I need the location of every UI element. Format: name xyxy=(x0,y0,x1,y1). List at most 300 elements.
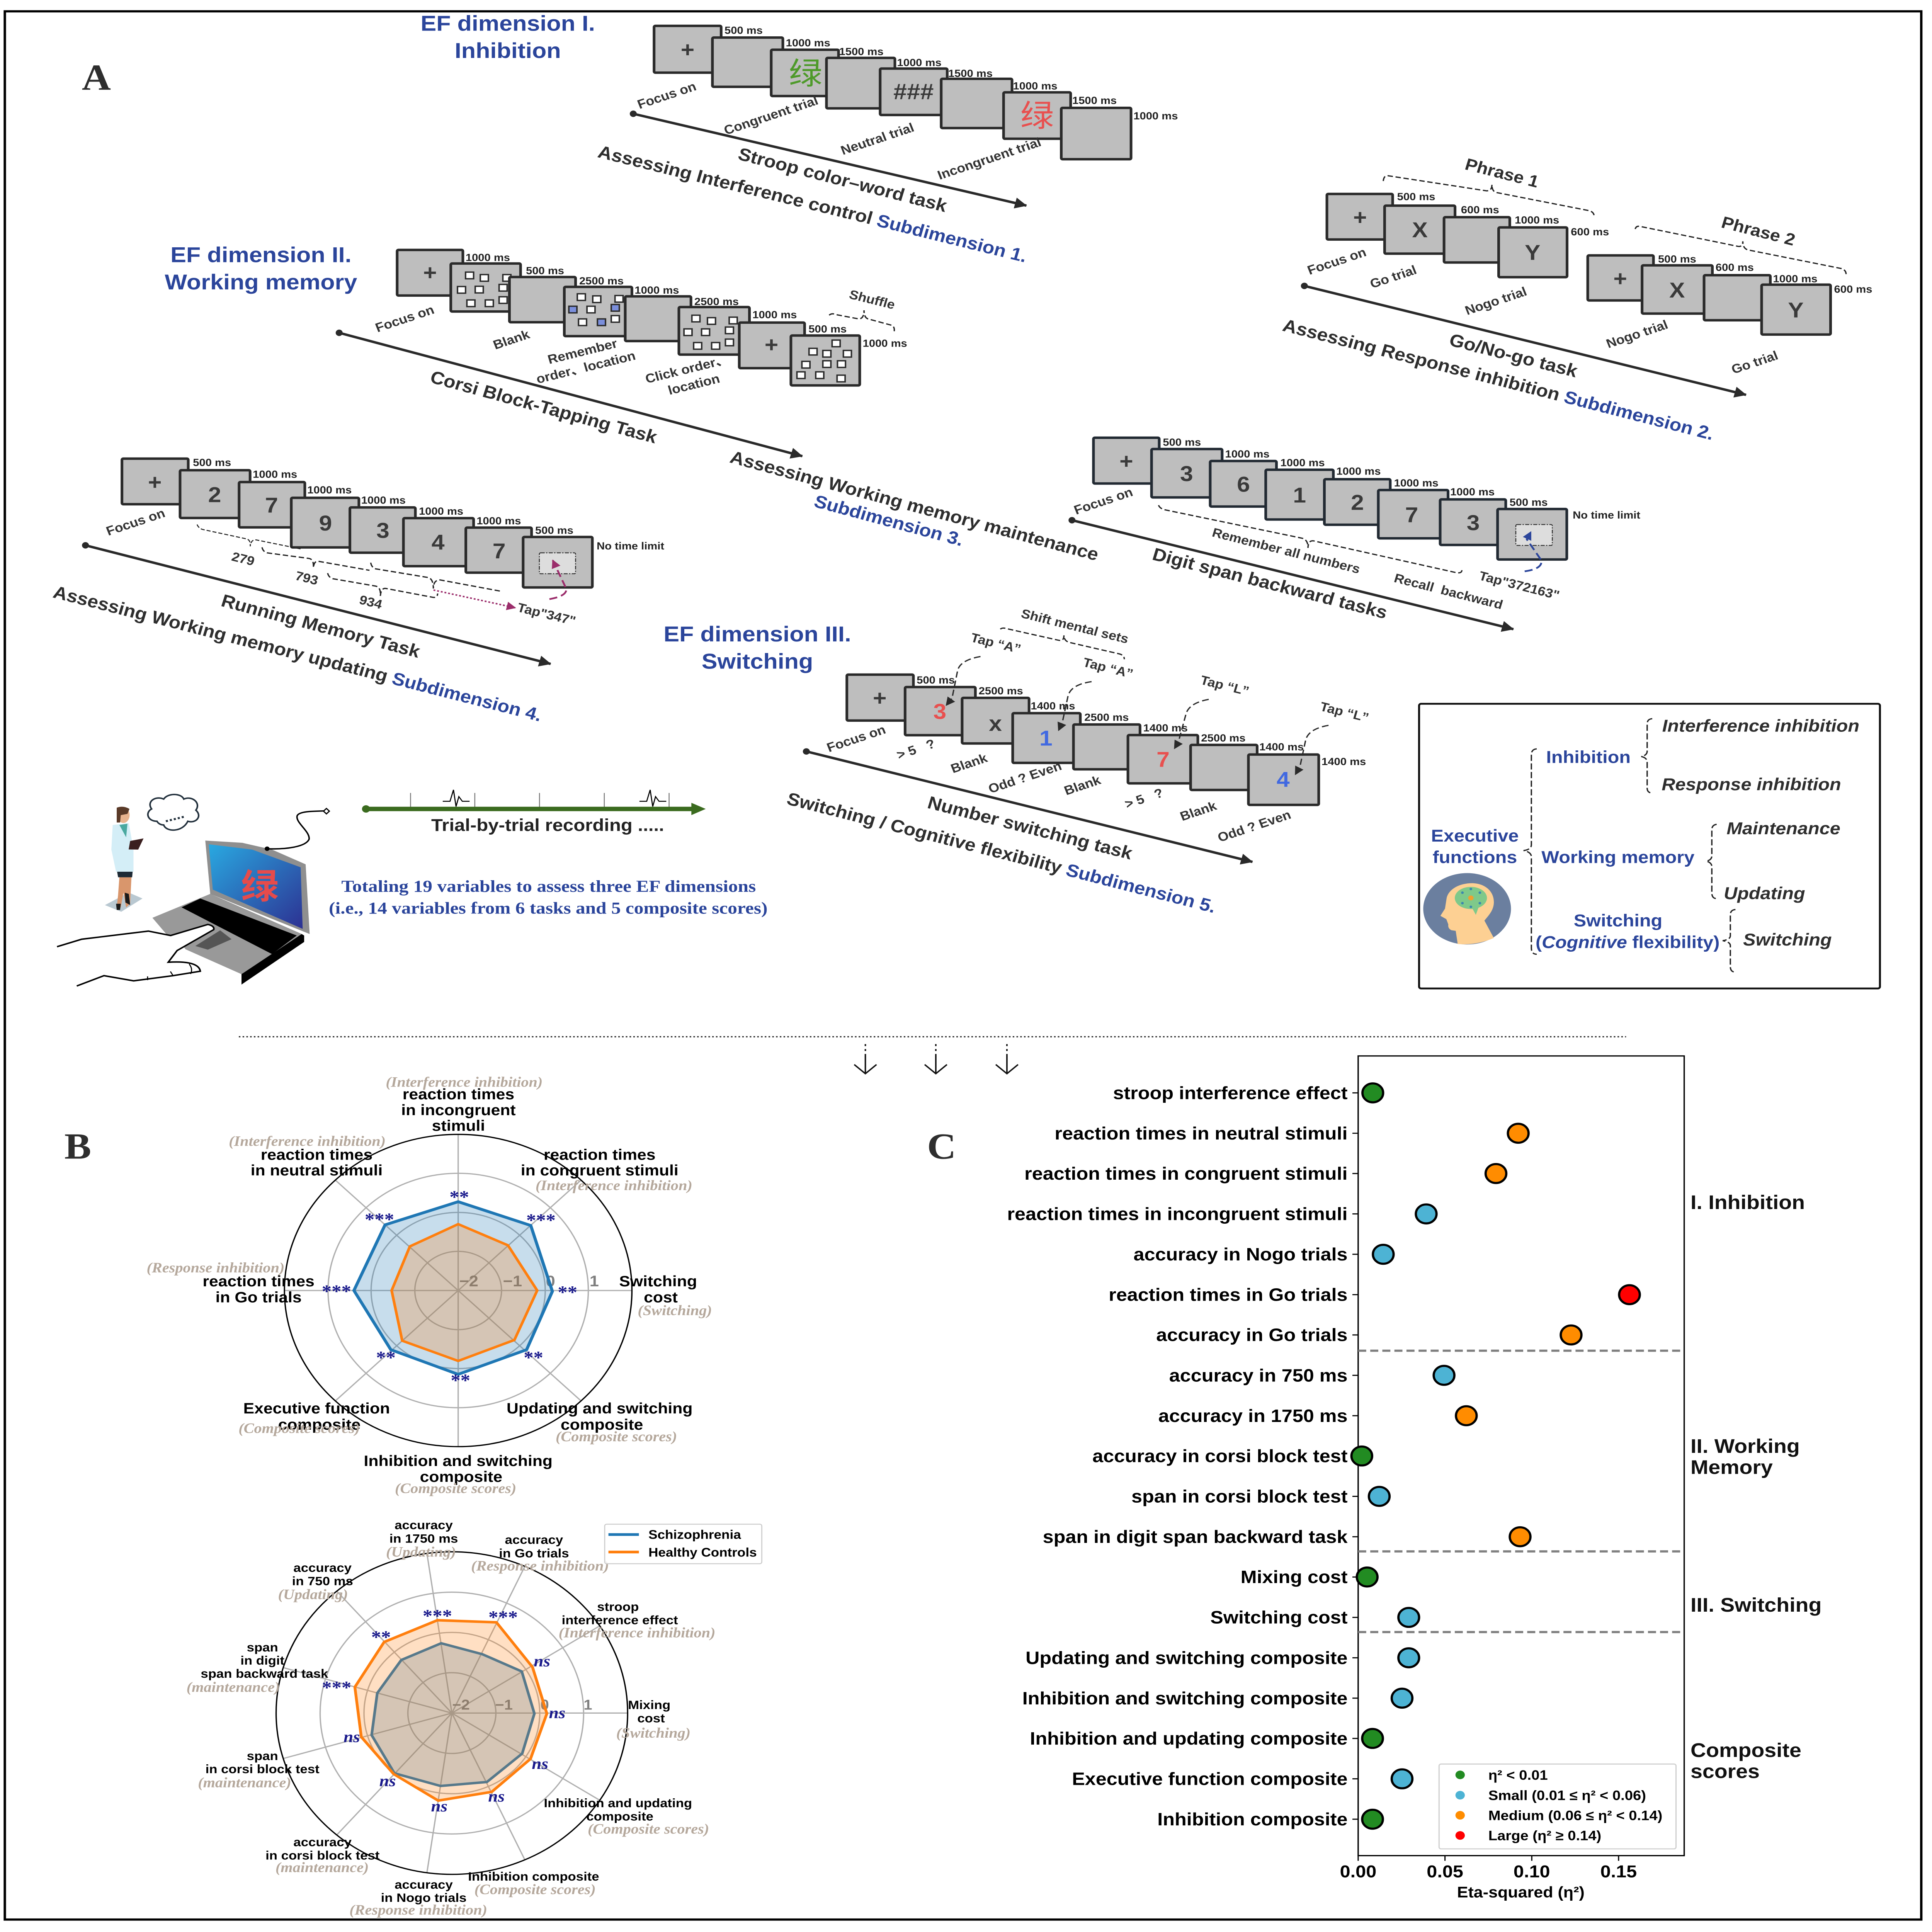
executive functions heading xyxy=(1431,826,1519,867)
Go/No-go trial screens: X xyxy=(1669,278,1685,302)
heading: EF dimension II xyxy=(165,243,357,294)
Shift mental sets bracket: Shift mental sets xyxy=(1019,607,1130,646)
radar tick labels xyxy=(459,1272,599,1290)
task: Digit span backward xyxy=(1068,437,1640,629)
Running memory durations: 1000 ms xyxy=(476,515,521,527)
dimension labels: Working memory xyxy=(1541,848,1694,867)
Corsi durations xyxy=(466,252,907,349)
Go/No-go durations: 500 ms xyxy=(1397,191,1435,202)
subdimension labels: Response inhibition xyxy=(1662,775,1841,794)
variable labels: accuracy in corsi block test xyxy=(1092,1446,1348,1466)
significance stars: ** xyxy=(558,1282,577,1302)
Digit span trial screens: 3 xyxy=(1180,462,1193,486)
icon: laptop xyxy=(152,840,310,985)
variable labels: accuracy in 1750 ms xyxy=(1158,1406,1348,1426)
Stroop trial screens: ### xyxy=(893,79,934,104)
variables summary text: Totaling 19 variables to assess three EF dimensions xyxy=(341,877,756,896)
window digit labels: 793 xyxy=(294,569,320,588)
Digit span labels xyxy=(1072,485,1561,612)
Stroop durations: 1000 ms xyxy=(1133,110,1178,122)
axis labels: Inhibition and updating xyxy=(544,1796,692,1810)
significance markers: *** xyxy=(488,1607,518,1627)
Digit span labels: Remember all numbers xyxy=(1211,526,1362,577)
axis category notes: (Interference inhibition) xyxy=(229,1134,386,1149)
Stroop trial screens: + xyxy=(681,38,694,62)
Corsi durations: 1000 ms xyxy=(863,338,907,349)
Corsi durations: 500 ms xyxy=(526,265,564,276)
axis category notes: (Composite scores) xyxy=(588,1821,709,1837)
Stroop trial labels: Incongruent trial xyxy=(935,135,1043,182)
Corsi trial labels: location xyxy=(667,372,721,398)
plot frame xyxy=(1358,1056,1684,1855)
window digit labels xyxy=(230,549,384,612)
Stroop durations: 1000 ms xyxy=(1013,80,1058,92)
axis category notes: (Response inhibition) xyxy=(147,1260,284,1276)
significance markers: ns xyxy=(532,1755,548,1773)
axis labels: cost xyxy=(637,1712,665,1725)
axis labels: in Go trials xyxy=(499,1547,569,1560)
Digit span trial screens: 1 xyxy=(1293,483,1306,507)
axis labels xyxy=(201,1519,692,1905)
variable labels: reaction times in congruent stimuli xyxy=(1024,1164,1348,1184)
Digit span labels: Focus on xyxy=(1072,485,1135,517)
group labels: II. Working xyxy=(1690,1435,1800,1458)
Digit span trial screens: 3 xyxy=(1467,511,1480,535)
dimension labels xyxy=(1536,747,1719,952)
effect size legend: Medium (0.06 ≤ η² < 0.14) xyxy=(1488,1808,1662,1823)
Number switching durations: 1400 ms xyxy=(1031,700,1075,711)
heading: EF dimension III: EF dimension III. xyxy=(663,622,851,646)
Corsi durations: 2500 ms xyxy=(694,296,739,307)
dimension labels: (Cognitive flexibility) xyxy=(1536,932,1719,952)
subdimension labels: Interference inhibition xyxy=(1662,716,1859,735)
dimension labels: Inhibition xyxy=(1546,747,1631,767)
Running memory trial screens: 7 xyxy=(265,493,278,517)
Go/No-go durations: 500 ms xyxy=(1658,253,1696,265)
significance markers: *** xyxy=(322,1677,351,1697)
Running memory trial screens: 2 xyxy=(208,483,221,507)
Running memory trial screens xyxy=(122,459,592,587)
Corsi trial labels: Blank xyxy=(491,327,532,352)
radar grid xyxy=(276,1552,628,1874)
x axis ticks and labels: 0.05 xyxy=(1427,1862,1463,1881)
Shift mental sets bracket xyxy=(1000,607,1130,659)
Stroop durations: 1500 ms xyxy=(1072,95,1117,106)
executive functions heading: Executive xyxy=(1431,826,1519,845)
Go/No-go trial screens: + xyxy=(1613,267,1627,291)
axis labels: in 750 ms xyxy=(292,1575,353,1588)
significance stars: *** xyxy=(322,1281,351,1301)
variable labels: reaction times in Go trials xyxy=(1109,1285,1348,1305)
panel letter B: B xyxy=(65,1126,91,1167)
Number switching trial screens: 3 xyxy=(933,700,946,724)
icon: thought cloud xyxy=(148,794,199,830)
Digit span durations: 1000 ms xyxy=(1225,448,1270,460)
Stroop durations: 500 ms xyxy=(724,24,763,36)
Digit span durations: 1000 ms xyxy=(1281,457,1325,468)
axis labels: in corsi block test xyxy=(265,1849,379,1862)
Corsi trial screens: + xyxy=(423,261,437,285)
variable labels: Mixing cost xyxy=(1241,1567,1348,1587)
significance stars: *** xyxy=(365,1209,394,1229)
Corsi durations: 1000 ms xyxy=(752,309,797,320)
Shuffle bracket: Shuffle xyxy=(847,287,897,312)
Number switching durations: 500 ms xyxy=(917,674,955,686)
radar chart: schizophrenia worse variables xyxy=(147,1075,712,1497)
subdimension 4 caption: Assessing Working memory updating Subdimension 4. xyxy=(51,582,544,725)
significance stars: ** xyxy=(376,1348,396,1367)
Digit span trial screens: 2 xyxy=(1351,491,1364,515)
icon: hand on keyboard xyxy=(57,924,214,986)
hierarchy brackets xyxy=(1524,719,1735,972)
effect size legend xyxy=(1439,1764,1676,1849)
Running memory durations: 500 ms xyxy=(193,457,231,468)
Go/No-go durations: 600 ms xyxy=(1571,226,1609,238)
variable labels: Inhibition and switching composite xyxy=(1022,1689,1348,1708)
axis labels: in Nogo trials xyxy=(381,1891,466,1905)
Go/No-go trial screens: Y xyxy=(1788,298,1804,322)
Go/No-go trial labels: Go trial xyxy=(1730,349,1780,377)
axis labels: accuracy xyxy=(293,1835,352,1849)
significance stars: ** xyxy=(449,1187,469,1207)
axis category notes: (Interference inhibition) xyxy=(559,1625,716,1641)
axis labels: reaction times xyxy=(544,1146,655,1163)
Number switching timeline arrow xyxy=(803,748,1252,862)
Running memory durations: 1000 ms xyxy=(307,484,352,496)
Stroop trial labels: Congruent trial xyxy=(722,94,820,138)
significance markers: ns xyxy=(549,1704,565,1722)
axis labels: in 1750 ms xyxy=(389,1532,458,1546)
Number switching task title: Number switching task xyxy=(925,793,1135,864)
axis labels: reaction times xyxy=(403,1086,514,1103)
axis category notes: (Updating) xyxy=(386,1544,456,1560)
Digit span trial screens: 6 xyxy=(1237,473,1250,497)
significance markers: ns xyxy=(534,1652,550,1670)
executive functions heading: functions xyxy=(1433,848,1517,867)
y tick marks xyxy=(1352,1093,1358,1819)
significance markers: ns xyxy=(344,1728,360,1746)
axis category notes: (Interference inhibition) xyxy=(386,1075,543,1090)
axis labels: composite xyxy=(420,1468,502,1485)
axis labels: composite xyxy=(561,1416,643,1433)
significance markers: ns xyxy=(379,1772,396,1790)
radar legend: Schizophrenia xyxy=(648,1528,741,1542)
Running memory durations: No time limit xyxy=(597,540,664,552)
heading: EF dimension III: Switching xyxy=(702,650,813,673)
task: Running memory xyxy=(51,457,664,725)
icon: laptop: 绿 xyxy=(241,859,279,908)
panel A: task paradigms xyxy=(51,12,1880,988)
effect size legend: Large (η² ≥ 0.14) xyxy=(1488,1828,1601,1843)
axis category notes: (maintenance) xyxy=(187,1680,280,1695)
Phrase brackets: Phrase 1 xyxy=(1463,155,1541,191)
Go/No-go trial labels xyxy=(1305,245,1780,377)
Corsi trial labels: Focus on xyxy=(373,303,436,335)
axis labels: cost xyxy=(644,1289,678,1306)
axis category notes: (Composite scores) xyxy=(474,1882,596,1898)
task: Number switching xyxy=(784,607,1370,917)
task: Corsi block-tapping xyxy=(336,250,1101,565)
axis labels: accuracy xyxy=(293,1561,352,1575)
Running memory trial screens: 9 xyxy=(319,511,332,535)
arrows from panel A to results xyxy=(854,1044,1018,1074)
Corsi durations: 500 ms xyxy=(808,323,847,335)
axis labels: in corsi block test xyxy=(206,1762,320,1776)
axis labels: in Go trials xyxy=(216,1289,302,1306)
axis labels: in congruent stimuli xyxy=(521,1162,679,1179)
effect size legend: Small (0.01 ≤ η² < 0.06) xyxy=(1488,1788,1646,1803)
significance markers: ns xyxy=(488,1787,505,1805)
Digit span durations: No time limit xyxy=(1573,509,1640,521)
axis labels: stroop xyxy=(597,1600,639,1614)
Stroop trial labels: Focus on xyxy=(635,79,698,112)
axis labels: composite xyxy=(278,1416,361,1433)
axis labels: interference effect xyxy=(562,1614,678,1627)
Go/No-go trial labels: Focus on xyxy=(1305,245,1368,278)
heading: EF dimension II: Working memory xyxy=(165,270,357,294)
panel letter A: A xyxy=(82,57,111,98)
Corsi durations: 2500 ms xyxy=(579,275,624,287)
Running memory durations: 500 ms xyxy=(535,525,573,536)
Stroop trial screens: 绿 xyxy=(789,56,822,91)
series: healthy controls xyxy=(392,1224,537,1361)
trial-by-trial recording timeline xyxy=(362,790,706,835)
subdimension 2 caption: Assessing Response inhibition Subdimension 2. xyxy=(1281,316,1716,444)
Go/No-go trial screens: Y xyxy=(1525,241,1541,265)
Number switching trial labels: Blank xyxy=(949,751,990,776)
Running memory trial screens: + xyxy=(148,470,162,495)
Digit span durations: 500 ms xyxy=(1163,437,1201,448)
subdimension labels: Maintenance xyxy=(1726,819,1840,838)
Go/No-go durations: 600 ms xyxy=(1461,204,1499,216)
icon: clinician xyxy=(105,807,144,912)
significance stars xyxy=(322,1187,577,1390)
illustration: clinician and participant at laptop xyxy=(57,794,329,986)
radar tick labels: 1 xyxy=(590,1272,599,1290)
Number switching trial screens: x xyxy=(989,712,1002,736)
subdimension labels xyxy=(1662,716,1859,949)
series: schizophrenia xyxy=(354,1202,553,1374)
Stroop timeline arrow xyxy=(630,111,1026,206)
variable labels: Switching cost xyxy=(1210,1608,1348,1628)
Stroop durations: 1500 ms xyxy=(948,68,993,79)
radar legend: Healthy Controls xyxy=(648,1546,757,1560)
variable labels: reaction times in incongruent stimuli xyxy=(1007,1204,1348,1224)
significance markers xyxy=(322,1606,565,1815)
Number switching trial labels: Odd ? Even xyxy=(986,759,1064,796)
significance stars: *** xyxy=(526,1210,556,1230)
Digit span timeline arrow xyxy=(1068,517,1514,629)
Digit span trial screens: 7 xyxy=(1405,503,1418,527)
Running memory trial screens: 3 xyxy=(376,519,389,543)
radar chart: healthy controls higher variables xyxy=(187,1519,716,1918)
Go/No-go trial screens xyxy=(1327,194,1831,335)
axis category notes: (Switching) xyxy=(616,1726,690,1741)
Digit span durations: 500 ms xyxy=(1510,497,1548,508)
axis category notes xyxy=(147,1075,712,1497)
heading: EF dimension I: EF dimension I. xyxy=(420,12,595,36)
Go/No-go trial screens: X xyxy=(1412,218,1428,242)
axis labels: accuracy xyxy=(505,1533,563,1547)
axis category notes: (Composite scores) xyxy=(238,1421,360,1436)
heading: EF dimension I: Inhibition xyxy=(455,39,561,63)
axis category notes: (Updating) xyxy=(278,1587,348,1602)
Tap response labels xyxy=(969,631,1370,725)
recall dotted arrow xyxy=(434,590,515,608)
Running memory durations xyxy=(193,457,664,552)
Go/No-go durations: 1000 ms xyxy=(1515,214,1559,226)
x axis ticks and labels: 0.10 xyxy=(1514,1862,1550,1881)
significance markers: ** xyxy=(371,1627,391,1647)
Digit span trial screens xyxy=(1094,438,1567,560)
Number switching trial labels: Odd ? Even xyxy=(1216,808,1293,845)
x axis title: Eta-squared (η²) xyxy=(1457,1884,1585,1901)
Stroop task title: Stroop color–word task xyxy=(736,144,949,216)
axis category notes: (Composite scores) xyxy=(556,1429,677,1445)
radar tick labels: −2 xyxy=(459,1272,478,1290)
Go/No-go trial labels: Nogo trial xyxy=(1604,318,1670,351)
Tap 347 label: Tap"347" xyxy=(516,600,577,628)
tap curved arrow xyxy=(549,560,566,599)
sliding window brackets xyxy=(197,524,502,597)
series: healthy controls xyxy=(355,1620,547,1801)
variable labels: accuracy in Go trials xyxy=(1156,1325,1348,1345)
Stroop durations: 1500 ms xyxy=(839,46,884,57)
Stroop durations: 1000 ms xyxy=(786,37,830,49)
task: Go/No-go xyxy=(1281,155,1872,444)
group labels xyxy=(1690,1192,1821,1782)
subdimension labels: Switching xyxy=(1743,930,1832,949)
axis labels: in neutral stimuli xyxy=(251,1162,383,1179)
Go/No-go timeline arrow xyxy=(1301,283,1746,395)
icon: head with brain xyxy=(1423,873,1511,944)
Tap response labels: Tap “L” xyxy=(1318,700,1370,725)
radar grid xyxy=(284,1134,632,1447)
working memory maintenance caption: Assessing Working memory maintenance xyxy=(728,447,1101,565)
Stroop trial labels xyxy=(635,79,1043,182)
axis labels: span backward task xyxy=(201,1667,328,1681)
radar tick labels: −1 xyxy=(495,1697,513,1713)
group labels: Composite xyxy=(1690,1740,1801,1762)
x axis ticks and labels xyxy=(1340,1855,1637,1881)
axis labels: accuracy xyxy=(395,1519,453,1532)
axis labels: span xyxy=(247,1749,278,1763)
icon: thought cloud: ..... xyxy=(162,806,186,825)
axis category notes: (Response inhibition) xyxy=(471,1558,609,1574)
Running memory durations: 1000 ms xyxy=(419,505,463,517)
dimension labels: Switching xyxy=(1574,911,1662,930)
axis labels: Switching xyxy=(619,1273,697,1290)
Digit span trial screens: + xyxy=(1119,449,1133,473)
variable labels: accuracy in 750 ms xyxy=(1169,1366,1348,1386)
panel B: radar charts xyxy=(65,1075,762,1918)
Number switching trial labels: Blank xyxy=(1062,773,1103,798)
axis labels: span xyxy=(247,1641,278,1655)
axis labels: Inhibition and switching xyxy=(364,1452,553,1469)
panel: executive functions hierarchy xyxy=(1419,704,1880,988)
Digit span labels: Tap"372163" xyxy=(1477,569,1561,603)
Digit span bracket xyxy=(1158,505,1462,573)
group labels: Memory xyxy=(1690,1456,1773,1478)
axis labels: in incongruent xyxy=(401,1102,516,1119)
Tap response labels: Tap “A” xyxy=(969,631,1022,656)
Number switching durations: 1400 ms xyxy=(1143,722,1188,734)
significance markers: ns xyxy=(431,1798,447,1815)
Number switching trial screens xyxy=(847,675,1319,805)
Number switching durations: 1400 ms xyxy=(1321,756,1366,767)
significance stars: ** xyxy=(451,1370,470,1390)
variable labels: Updating and switching composite xyxy=(1026,1648,1348,1668)
Stroop trial labels: Neutral trial xyxy=(839,121,916,158)
variable labels: accuracy in Nogo trials xyxy=(1134,1245,1348,1265)
Go/No-go durations xyxy=(1397,191,1872,295)
axis labels: accuracy xyxy=(395,1878,453,1891)
radar tick labels: −2 xyxy=(452,1697,470,1713)
group labels: III. Switching xyxy=(1690,1594,1821,1616)
axis labels: Mixing xyxy=(628,1698,670,1712)
x axis ticks and labels: 0.00 xyxy=(1340,1862,1376,1881)
Running memory trial screens: 4 xyxy=(432,531,445,554)
Go/No-go trial screens: + xyxy=(1353,206,1367,230)
dotted divider between panels xyxy=(239,1036,1626,1037)
Go/No-go durations: 600 ms xyxy=(1834,284,1872,295)
Digit span durations: 1000 ms xyxy=(1336,465,1381,477)
Shuffle bracket xyxy=(829,287,897,331)
axis labels xyxy=(202,1086,697,1485)
Running memory timeline arrow xyxy=(82,542,551,664)
Number switching trial labels xyxy=(825,723,1293,845)
panel C: effect size dot plot xyxy=(927,1056,1821,1901)
group labels: scores xyxy=(1690,1760,1760,1782)
Stroop trial screens: 绿 xyxy=(1020,99,1054,133)
panel letter C: C xyxy=(927,1126,956,1167)
Corsi durations: 1000 ms xyxy=(634,284,679,296)
axis category notes: (maintenance) xyxy=(198,1775,291,1791)
Corsi durations: 1000 ms xyxy=(466,252,510,263)
heading: EF dimension II: EF dimension II. xyxy=(170,243,352,267)
axis category notes: (Response inhibition) xyxy=(349,1902,487,1918)
Digit span durations xyxy=(1163,437,1640,521)
Corsi trial labels: Remember xyxy=(546,337,619,367)
Digit span durations: 1000 ms xyxy=(1394,477,1439,489)
Number switching durations: 2500 ms xyxy=(1084,711,1129,723)
axis labels: composite xyxy=(586,1810,653,1823)
subdimension labels: Updating xyxy=(1724,884,1805,903)
Corsi trial screens: + xyxy=(765,333,778,357)
variables summary text xyxy=(329,877,767,917)
axis labels: stimuli xyxy=(432,1117,485,1134)
Running memory trial screens: 7 xyxy=(493,539,506,563)
variables summary text: (i.e., 14 variables from 6 tasks and 5 composite scores) xyxy=(329,899,767,917)
Corsi timeline arrow xyxy=(336,330,802,456)
Number switching durations: 2500 ms xyxy=(979,685,1023,697)
Corsi task title: Corsi Block-Tapping Task xyxy=(428,367,660,447)
axis category notes: (Switching) xyxy=(638,1303,712,1318)
x axis ticks and labels: 0.15 xyxy=(1600,1862,1637,1881)
axis labels: Updating and switching xyxy=(507,1400,692,1417)
axis category notes: (maintenance) xyxy=(276,1860,369,1876)
Go/No-go durations: 1000 ms xyxy=(1773,273,1818,284)
Number switching trial screens: 4 xyxy=(1277,768,1290,792)
Digit span task title: Digit span backward tasks xyxy=(1150,544,1389,623)
Stroop durations xyxy=(724,24,1178,122)
axis category notes xyxy=(187,1544,716,1918)
heading: EF dimension I xyxy=(420,12,595,63)
Digit span labels: Recall backward xyxy=(1393,571,1505,612)
Corsi trial labels: Click order、 xyxy=(644,352,731,386)
Phrase brackets: Phrase 2 xyxy=(1719,213,1798,249)
Number switching trial screens: 1 xyxy=(1039,726,1053,750)
